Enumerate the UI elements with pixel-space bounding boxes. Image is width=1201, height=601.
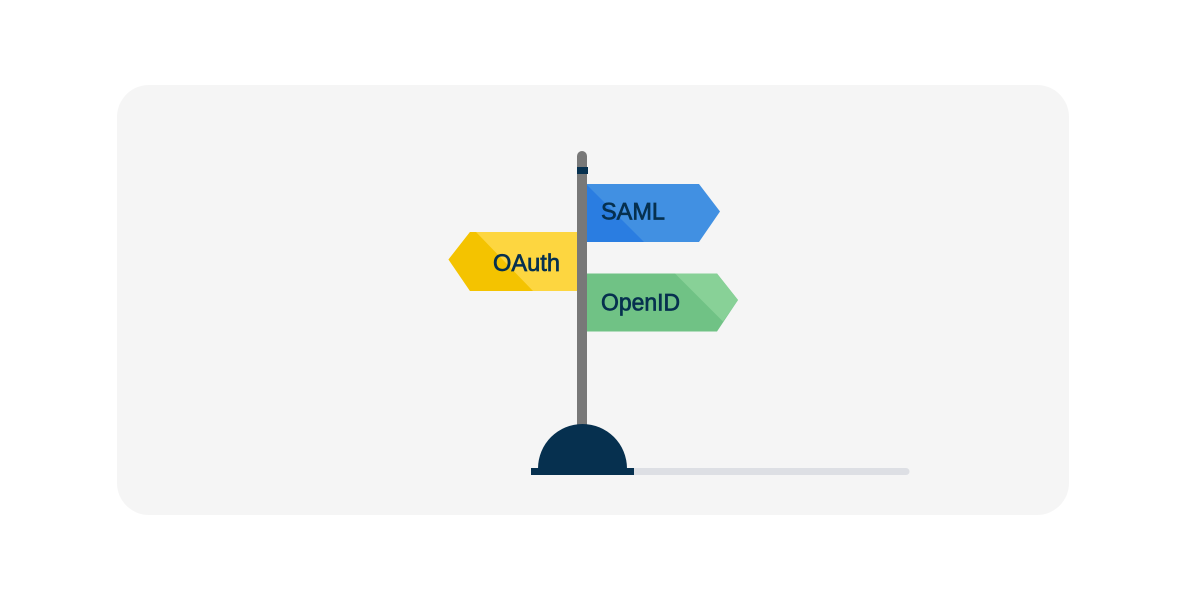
- sign: SAML: SAML: [601, 198, 665, 226]
- sign: OpenID: OpenID: [601, 290, 680, 316]
- panel: background card: [117, 85, 1069, 515]
- ground line: [600, 468, 910, 475]
- pole: [577, 151, 587, 425]
- sign: SAML: [587, 184, 720, 242]
- pole band: [577, 167, 588, 174]
- sign: OAuth: OAuth: [493, 250, 560, 277]
- pole base plate: [531, 468, 634, 475]
- pole base dome: [538, 424, 627, 468]
- sign: OAuth: [448, 232, 577, 291]
- sign: OpenID: [587, 274, 738, 332]
